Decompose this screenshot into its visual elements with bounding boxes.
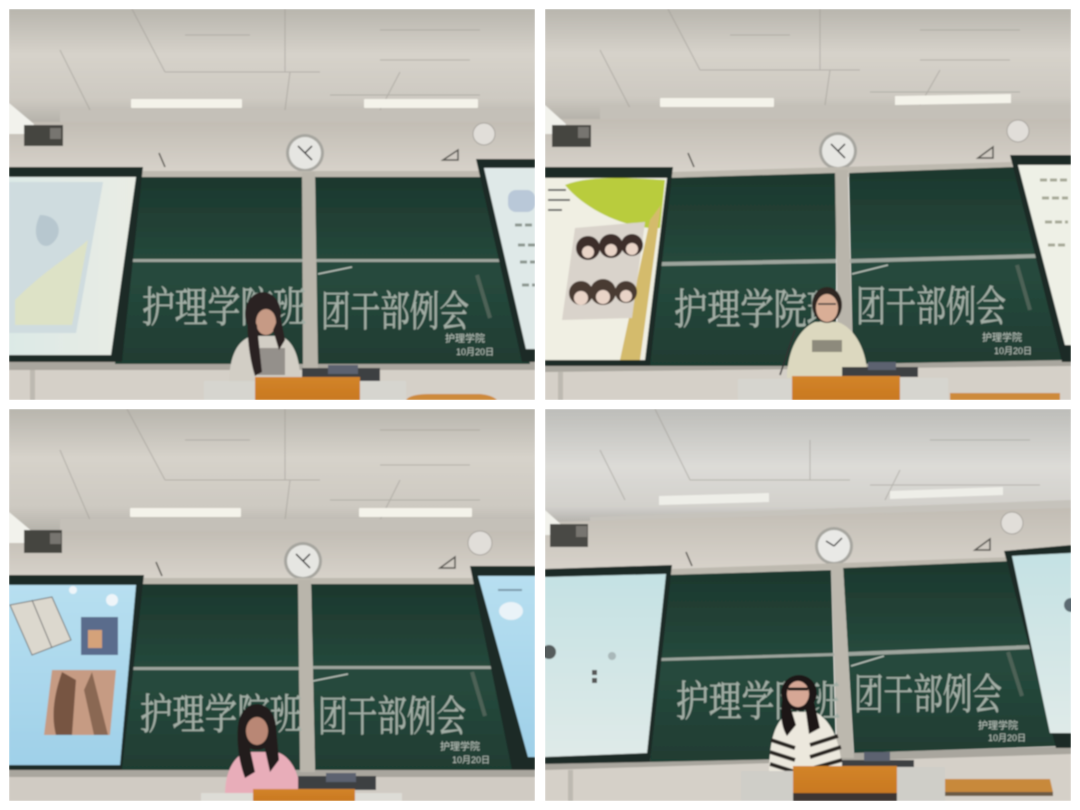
ceiling light right — [895, 94, 1011, 105]
side desk — [950, 393, 1060, 400]
screen brackets — [156, 557, 455, 576]
ceiling — [545, 9, 1071, 119]
lectern speaker left — [738, 379, 792, 400]
wall clock — [284, 542, 322, 580]
projection screen left with blue slide — [9, 575, 144, 770]
orange lectern — [793, 766, 897, 801]
board top edge — [670, 162, 1012, 178]
projector — [9, 103, 63, 146]
chalk heading right: 团干部例会 — [856, 285, 1006, 331]
chalk signature — [982, 331, 1032, 356]
ceiling — [9, 409, 535, 531]
orange lectern — [253, 789, 355, 801]
chalk heading left: 护理学院班 — [674, 287, 840, 334]
side desk — [406, 394, 497, 400]
chalk signature: 10月20日 — [456, 347, 494, 357]
panel: photo 2, speaker in cream hoodie — [545, 9, 1071, 400]
wall clock — [286, 134, 324, 172]
desk objects — [842, 362, 918, 377]
chalk signature: 护理学院 — [982, 331, 1022, 344]
projection screen right with blue slide — [470, 566, 535, 770]
panel: photo 3, speaker in pink sweater — [9, 409, 535, 801]
smoke detector — [473, 123, 495, 145]
chalk heading right: 团干部例会 — [321, 290, 469, 336]
screen brackets — [686, 539, 990, 566]
side desk — [945, 779, 1053, 796]
orange lectern — [792, 376, 900, 400]
board top edge — [670, 557, 1012, 575]
lectern speaker right — [900, 378, 948, 400]
smoke detector — [1001, 512, 1023, 534]
panel: photo 1, speaker in grey sweatshirt — [9, 9, 535, 400]
blackboard right — [843, 561, 1058, 753]
chalk heading left: 护理学院班 — [142, 285, 306, 332]
chalk signature: 10月20日 — [452, 755, 490, 765]
desk objects — [842, 752, 914, 767]
board centre pillar — [298, 580, 315, 772]
smoke detector — [468, 531, 492, 555]
panel: photo 4, speaker in striped cardigan — [542, 409, 1078, 801]
blackboard right — [315, 177, 530, 364]
speaker in pink sweater — [225, 704, 300, 795]
projection screen left, pale slide — [542, 565, 672, 764]
projector — [545, 510, 588, 547]
lower wall and chalk tray — [545, 358, 1071, 400]
projector — [9, 512, 62, 553]
chalk signature — [978, 719, 1026, 743]
projection screen right, pale slide — [1004, 545, 1078, 748]
chalk heading left: 护理学院班 — [676, 679, 840, 726]
chalk signature — [445, 332, 494, 357]
orange lectern — [255, 377, 360, 400]
wall — [9, 122, 535, 177]
smoke detector — [1007, 120, 1029, 142]
blackboard right — [849, 167, 1066, 364]
chalk heading right: 团干部例会 — [318, 695, 466, 741]
desk objects — [298, 773, 376, 790]
ceiling — [9, 9, 535, 122]
board centre pillar — [831, 566, 854, 758]
chalk signature — [440, 740, 490, 765]
ceiling — [545, 409, 1071, 526]
ceiling light right — [359, 508, 472, 517]
chalk signature: 10月20日 — [988, 733, 1026, 743]
wall clock — [819, 132, 857, 170]
wall clock — [815, 527, 853, 565]
chalk signature: 护理学院 — [978, 719, 1018, 732]
projection screen left — [9, 167, 143, 362]
lower wall and chalk tray — [9, 362, 535, 400]
projection screen left with cartoon slide — [545, 167, 673, 366]
board top edge — [140, 578, 475, 584]
wall — [9, 531, 535, 583]
lectern speaker left — [741, 771, 793, 801]
chalk signature: 10月20日 — [994, 346, 1032, 356]
lower wall and chalk tray — [9, 770, 535, 801]
blackboard left — [115, 177, 303, 364]
board top edge — [140, 171, 485, 177]
speaker in striped cardigan — [769, 675, 842, 776]
projector — [545, 105, 591, 147]
screen brackets — [159, 150, 458, 167]
wall — [545, 508, 1071, 575]
lectern speaker right — [897, 767, 945, 801]
lectern speaker right — [355, 793, 402, 801]
blackboard left — [115, 584, 300, 770]
chalk heading left: 护理学院班 — [140, 692, 302, 739]
desk objects — [302, 365, 380, 381]
lower wall and chalk tray — [545, 746, 1071, 801]
chalk signature: 护理学院 — [440, 740, 480, 753]
chalk heading right: 团干部例会 — [854, 673, 1002, 719]
ceiling light left — [131, 99, 242, 108]
ceiling light right — [890, 487, 1003, 499]
board centre pillar — [835, 170, 853, 366]
ceiling light left — [130, 508, 241, 517]
projection screen right — [1010, 155, 1071, 362]
speaker in cream hoodie — [780, 287, 867, 378]
ceiling light left — [659, 493, 769, 505]
ceiling light right — [364, 99, 478, 108]
blackboard left — [650, 570, 836, 762]
blackboard left — [645, 173, 836, 366]
board centre pillar — [302, 172, 318, 368]
wall — [545, 119, 1071, 177]
chalk signature: 护理学院 — [445, 332, 485, 345]
blackboard right — [311, 584, 518, 770]
lectern speaker right — [360, 381, 406, 400]
screen brackets — [688, 147, 993, 167]
lectern speaker left — [201, 793, 253, 801]
speaker in grey sweatshirt — [229, 292, 300, 385]
lectern speaker left — [229, 382, 255, 385]
ceiling light left — [660, 98, 774, 107]
projection screen right — [476, 159, 535, 362]
